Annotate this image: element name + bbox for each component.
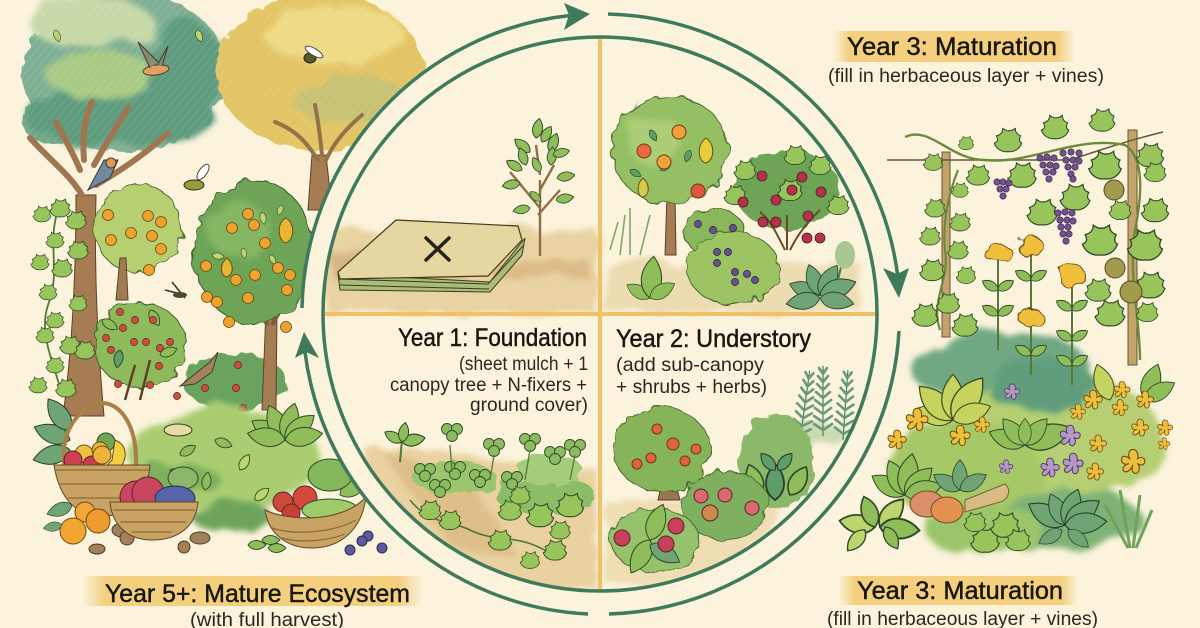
illustration: blueberry bushes	[684, 208, 779, 304]
illustration: broad yellow-green plant	[911, 361, 1179, 456]
illustration: vine on trunk	[29, 199, 95, 397]
text: Year 2 heading and note: (add sub-canopy	[616, 355, 765, 376]
arrow: Year 2 to Year 3	[609, 331, 899, 614]
illustration: foreground leaves and squash	[838, 452, 1152, 555]
soil band	[322, 228, 597, 312]
text: Year 1 heading and note: Year 1: Foundation	[398, 324, 587, 352]
illustration: raspberry bush	[724, 146, 849, 250]
text: Year 2 heading and note: Year 2: Understory	[616, 325, 811, 353]
illustration: vine leaves	[912, 109, 1169, 336]
soil band	[604, 262, 860, 312]
illustration: clover and creeping vines	[410, 424, 595, 568]
illustration: berry basket	[110, 467, 198, 540]
arrow: Year 3 to Year 5+	[295, 332, 588, 614]
text: Year 1 heading and note: canopy tree + N-fixers +	[390, 375, 587, 396]
text: Year 1 heading and note	[390, 324, 588, 416]
label: Year 3 Maturation top: (fill in herbaceous layer + vines)	[828, 66, 1104, 87]
label: Year 5+ Mature Ecosystem	[82, 576, 422, 628]
illustration: green ground	[130, 401, 324, 531]
illustration: trellis posts and wire	[887, 130, 1163, 365]
illustration: orange and pear tree	[194, 180, 314, 410]
label: Year 5+ Mature Ecosystem: Year 5+: Mature Ecosystem	[105, 580, 410, 608]
icon: stacked mulch sheets	[338, 220, 525, 292]
illustration: low garden plants	[887, 332, 1162, 554]
arrow: Year 5+ to Year 1	[302, 3, 590, 308]
panel: central four-year cycle	[322, 36, 878, 591]
label: Year 3 Maturation bottom	[827, 576, 1098, 628]
quadrant: Year 1 ground cover	[360, 422, 597, 590]
illustration: seedling	[382, 422, 426, 462]
illustration: large fruit basket	[31, 394, 150, 516]
label: Year 3 Maturation top	[828, 31, 1104, 87]
text: Year 1 heading and note: ground cover)	[470, 395, 588, 416]
illustration: herbs and leafy plants	[610, 208, 859, 312]
text: Year 2 heading and note: + shrubs + herbs)	[616, 377, 767, 398]
illustration: small tree with red fruit	[614, 408, 710, 500]
arrow: Year 1 to Year 2	[608, 14, 909, 298]
quadrant: Year 2 understory plants	[604, 366, 857, 585]
icon: X mark	[426, 238, 449, 260]
illustration: yellow canopy tree	[215, 0, 425, 210]
divider: vertical	[598, 36, 602, 590]
illustration: grape clusters	[994, 149, 1082, 244]
panel: Year 5+ mature ecosystem illustration	[20, 0, 425, 555]
illustration: vegetable basket	[265, 451, 374, 548]
inner cycle ring	[323, 37, 877, 591]
cycle disc backdrop	[301, 15, 899, 613]
text: Year 1 heading and note: (sheet mulch + 1	[459, 354, 588, 375]
illustration: tall yellow flowers	[980, 237, 1090, 385]
label: Year 3 Maturation top: Year 3: Maturation	[847, 33, 1057, 61]
soil band	[604, 500, 800, 585]
illustration: low shrub	[183, 354, 287, 410]
illustration: leafy green herb	[738, 414, 814, 510]
illustration: rosemary	[792, 366, 855, 447]
illustration: red berry bush	[94, 303, 247, 412]
illustration: green canopy tree	[20, 0, 230, 416]
illustration: fruit tree	[612, 96, 728, 255]
illustration: garden flowers	[888, 381, 1173, 480]
illustration: melons	[1104, 180, 1142, 303]
illustration: birds and insects	[88, 42, 324, 386]
illustration: loose blueberries and clover	[248, 531, 387, 555]
panel: Year 3 garden illustration	[838, 109, 1179, 555]
text: Year 2 heading and note	[616, 325, 811, 398]
quadrant: Year 1 sheet mulch and sapling	[322, 118, 597, 312]
label: Year 3 Maturation bottom: Year 3: Maturation	[857, 577, 1063, 605]
soil band	[360, 446, 597, 590]
icon: sapling	[501, 118, 576, 256]
divider: horizontal	[323, 312, 878, 316]
illustration: raspberry plants	[611, 471, 769, 578]
quadrant: Year 2 fruit tree and berries	[604, 96, 860, 312]
illustration: oranges and nuts	[43, 499, 210, 554]
illustration: small orange tree	[94, 184, 182, 300]
